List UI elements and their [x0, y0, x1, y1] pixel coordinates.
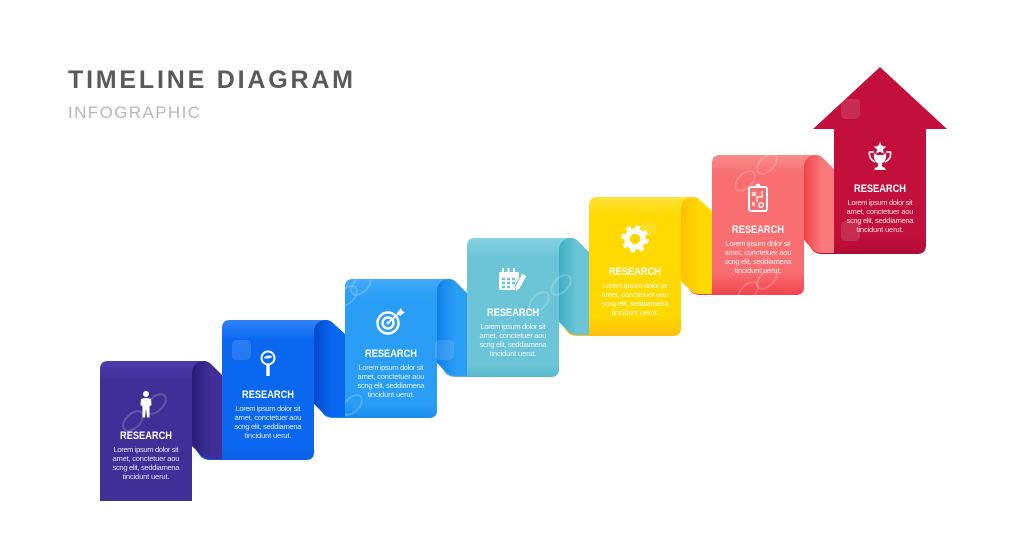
description: [112, 445, 180, 481]
description: amet, conctetuer aou: [358, 372, 424, 381]
label: RESEARCH: [365, 348, 417, 360]
description: amet, conctetuer aou: [724, 248, 792, 257]
description: [602, 281, 669, 317]
label: RESEARCH: [487, 307, 539, 319]
description: [846, 198, 914, 234]
subtitle: INFOGRAPHIC: [68, 103, 200, 122]
step 6: clipboard card: [686, 151, 834, 305]
fold: [192, 361, 222, 459]
description: amet, conctetuer aou: [602, 290, 668, 299]
icon: target: [378, 308, 405, 334]
icon: person: [140, 391, 152, 418]
description: Lorem ipsum dolor sit: [848, 198, 913, 207]
step 3: target card: [319, 272, 467, 418]
description: Lorem ipsum dolor sit: [602, 281, 668, 290]
description: scng elit, seddiamena: [112, 463, 180, 472]
description: [480, 322, 547, 358]
label: RESEARCH: [609, 266, 661, 278]
description: amet, conctetuer aou: [480, 331, 546, 340]
fold: [804, 155, 834, 253]
description: scng elit, seddiamena: [602, 299, 669, 308]
description: scng elit, seddiamena: [724, 257, 792, 266]
description: tincidunt uerut.: [612, 308, 658, 317]
description: amet, conctetuer aou: [234, 413, 302, 422]
label: RESEARCH: [854, 183, 906, 195]
description: [724, 239, 792, 275]
icon: clipboard: [749, 184, 767, 211]
step 4: calendar card: [441, 238, 589, 377]
description: tincidunt uerut.: [368, 390, 414, 399]
description: scng elit, seddiamena: [846, 216, 914, 225]
step 7: arrow: [808, 67, 947, 254]
description: tincidunt uerut.: [244, 431, 292, 440]
description: amet, conctetuer aou: [846, 207, 914, 216]
description: tincidunt uerut.: [122, 472, 170, 481]
step 5: gear card: [563, 197, 712, 336]
description: scng elit, seddiamena: [234, 422, 302, 431]
description: Lorem ipsum dolor sit: [358, 363, 424, 372]
description: scng elit, seddiamena: [358, 381, 425, 390]
description: Lorem ipsum dolor sit: [236, 404, 301, 413]
label: RESEARCH: [242, 389, 294, 401]
description: Lorem ipsum dolor sit: [726, 239, 791, 248]
title: TIMELINE DIAGRAM: [68, 66, 353, 94]
icon: magnifier: [262, 352, 274, 376]
step 2: magnifier card: [196, 320, 345, 460]
description: scng elit, seddiamena: [480, 340, 547, 349]
fold: [437, 279, 467, 376]
description: Lorem ipsum dolor sit: [480, 322, 546, 331]
description: amet, conctetuer aou: [112, 454, 180, 463]
fold: [559, 238, 589, 335]
icon: gear: [624, 228, 646, 250]
description: tincidunt uerut.: [734, 266, 782, 275]
fold: [681, 197, 712, 294]
description: tincidunt uerut.: [490, 349, 536, 358]
label: RESEARCH: [732, 224, 784, 236]
step 1: person card: [100, 361, 222, 501]
description: Lorem ipsum dolor sit: [114, 445, 179, 454]
label: RESEARCH: [120, 430, 172, 442]
fold: [314, 320, 345, 417]
description: tincidunt uerut.: [856, 225, 904, 234]
description: [234, 404, 302, 440]
icon: trophy: [869, 142, 891, 170]
icon: calendar and pencil: [499, 268, 527, 292]
description: [358, 363, 425, 399]
